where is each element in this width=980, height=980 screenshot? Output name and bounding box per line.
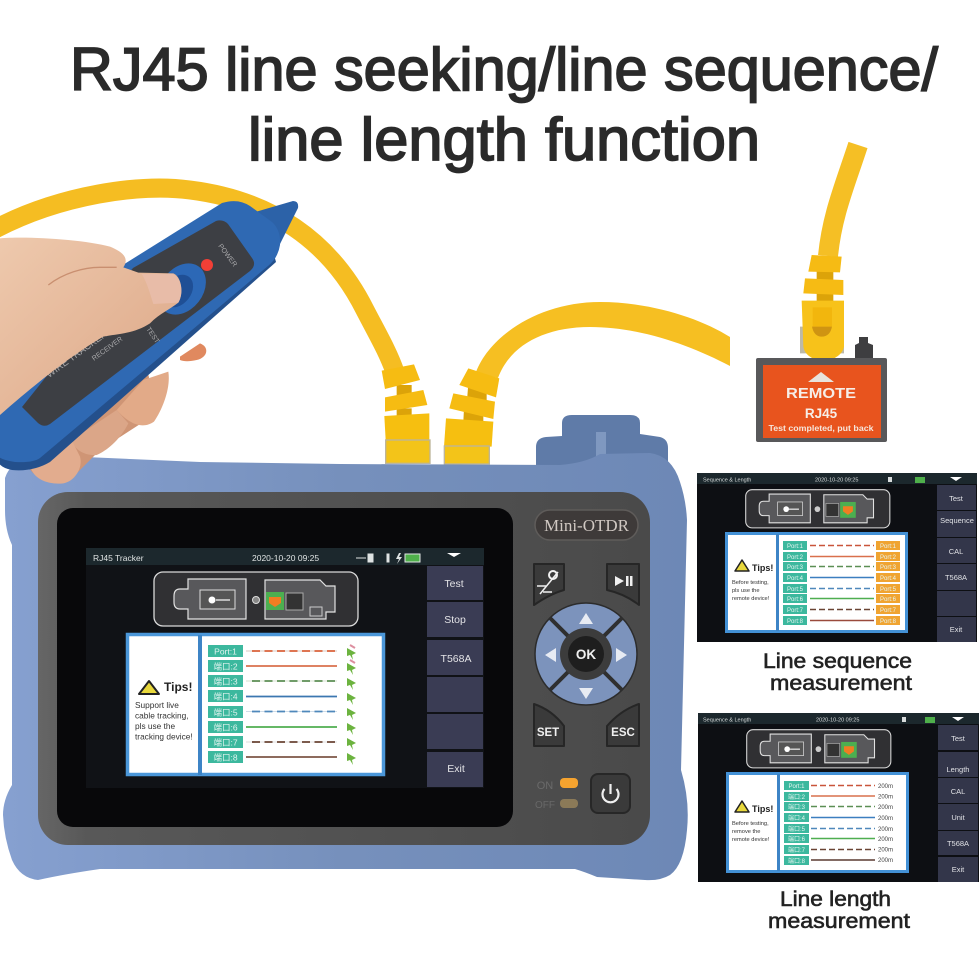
side buttons: Test (444, 578, 464, 590)
tracer labels: TEST (144, 326, 161, 346)
tips panel: pls use the (732, 588, 760, 594)
side buttons: Test (949, 494, 964, 503)
product badge (535, 510, 638, 540)
side buttons: Test (951, 734, 966, 743)
tips text: cable tracking, (135, 710, 188, 720)
remote module (756, 337, 887, 442)
port rows: Port:6 (880, 597, 897, 603)
hand: palm and thumb (0, 238, 181, 415)
tracer casing shadow edge (0, 240, 276, 470)
tips text: tracking device! (135, 732, 193, 742)
status bar: 2020-10-20 09:25 (252, 553, 319, 563)
side buttons: Exit (952, 865, 965, 874)
status bar: Sequence & Length (703, 718, 751, 724)
key: power (591, 774, 630, 813)
caption: line sequence: measurement (770, 672, 912, 695)
side buttons: T568A (947, 839, 969, 848)
remote module: REMOTE (786, 386, 856, 402)
side buttons: Sequence (940, 516, 974, 525)
side buttons: T568A (441, 653, 471, 665)
port rows: 端口:4 (213, 692, 238, 702)
caption: line length: Line length (780, 888, 891, 911)
side buttons: Stop (444, 614, 466, 626)
d-pad (535, 603, 637, 705)
caption: line length: measurement (768, 910, 910, 933)
port rows: Port:8 (880, 619, 897, 625)
side buttons: Length (947, 765, 969, 774)
port rows: Port:2 (880, 555, 897, 561)
tracer labels: POWER (216, 243, 238, 268)
power LED (201, 259, 213, 271)
tracer button (148, 254, 216, 324)
tracer probe tip (252, 201, 298, 244)
length screenshot (698, 713, 979, 882)
remote RJ45 plug (800, 255, 844, 362)
port rows: Port:1 (880, 544, 897, 550)
tracking signal icons (347, 645, 356, 765)
tips panel: Tips! (752, 804, 773, 814)
tips text: pls use the (135, 721, 176, 731)
connector: right RJ45 plug (444, 368, 499, 464)
port rows: Port:3 (787, 565, 804, 571)
caption: line length (768, 888, 910, 933)
port rows: Port:7 (880, 608, 897, 614)
tips panel: remote device! (732, 837, 770, 843)
tips panel: Tips! (752, 563, 773, 573)
caption: line sequence (763, 650, 912, 695)
tips panel: remote device! (732, 596, 770, 602)
remote module: RJ45 (805, 406, 838, 421)
port rows: Port:6 (787, 597, 804, 603)
port rows: 端口:5 (788, 825, 806, 833)
side buttons: CAL (951, 787, 965, 796)
hand: lower fingers (0, 343, 206, 484)
port rows (783, 541, 900, 625)
module graphic (747, 730, 891, 768)
port rows: 200m (878, 837, 893, 843)
module graphic (746, 490, 890, 528)
sequence screenshot (697, 473, 977, 642)
port rows: 200m (878, 784, 893, 790)
port rows: Port:3 (880, 565, 897, 571)
port rows: 端口:5 (213, 708, 238, 718)
port rows: 200m (878, 848, 893, 854)
port rows: Port:5 (880, 587, 897, 593)
port rows: 端口:2 (788, 793, 806, 801)
tracer casing (0, 201, 280, 462)
cable: right cable (476, 302, 730, 378)
status bar: Sequence & Length (703, 478, 751, 484)
tips panel: Before testing, (732, 580, 769, 586)
port rows: Port:4 (880, 576, 897, 582)
port rows: Port:1 (787, 544, 804, 550)
port rows: 端口:6 (788, 835, 806, 843)
module graphic (154, 572, 358, 626)
wire tracer (0, 201, 298, 470)
port rows: 端口:6 (213, 722, 238, 732)
tips panel (128, 634, 384, 775)
indicator lights (535, 778, 578, 811)
tips panel (726, 534, 906, 632)
warning icon (139, 681, 159, 694)
side buttons (938, 725, 978, 882)
tips panel: Tips! (164, 680, 192, 694)
port rows: 200m (878, 794, 893, 800)
key: search (534, 564, 564, 605)
tracer labels (44, 243, 238, 380)
side buttons (427, 566, 483, 787)
port rows: 200m (878, 805, 893, 811)
key: ESC (607, 704, 639, 746)
key: SET (534, 704, 564, 746)
caption: line sequence: Line sequence (763, 650, 912, 673)
key: SET: SET (537, 727, 559, 739)
side buttons: Unit (951, 813, 966, 822)
key: play pause (607, 564, 639, 605)
port rows: Port:2 (787, 555, 804, 561)
port rows: 200m (878, 816, 893, 822)
port rows: 端口:8 (213, 752, 238, 762)
tracer labels: RECEIVER (91, 336, 124, 363)
status bar: RJ45 Tracker (93, 553, 144, 563)
port rows: Port:7 (787, 608, 804, 614)
port rows (208, 645, 356, 765)
remote cable (828, 145, 858, 256)
bezel (38, 492, 650, 845)
port rows: Port:1 (214, 646, 237, 656)
port rows: 端口:3 (213, 676, 238, 686)
side buttons: Exit (950, 625, 963, 634)
port rows: Port:4 (787, 576, 804, 582)
tracer face panel (22, 220, 254, 426)
side buttons (937, 485, 976, 642)
product badge: Mini-OTDR (544, 516, 630, 535)
main screen (86, 548, 484, 788)
status bar (93, 553, 461, 564)
port rows: 端口:8 (788, 857, 806, 865)
port rows: 200m (878, 858, 893, 864)
status bar: 2020-10-20 09:25 (815, 478, 858, 484)
status bar: 2020-10-20 09:25 (816, 718, 859, 724)
side buttons: Exit (447, 763, 465, 775)
port rows: 端口:7 (213, 738, 238, 748)
port rows: Port:5 (787, 587, 804, 593)
status bar (703, 717, 964, 724)
side buttons: T568A (945, 573, 967, 582)
indicator lights: OFF (535, 800, 555, 811)
tips panel: Before testing, (732, 821, 769, 827)
tips text: Support live (135, 700, 179, 710)
indicator lights: ON (537, 780, 553, 792)
device body (3, 453, 688, 880)
tips text (135, 700, 193, 742)
device knob (536, 415, 668, 470)
port rows (784, 781, 893, 865)
port rows: 端口:3 (788, 803, 806, 811)
title: RJ45 line seeking/line sequence/ (70, 36, 938, 103)
tips panel: remove the (732, 829, 760, 835)
status bar (703, 477, 962, 484)
title: line length function (248, 106, 760, 173)
tips panel (728, 774, 908, 872)
key: ESC: ESC (611, 727, 635, 739)
remote module: Test completed, put back (768, 423, 874, 433)
connector: left RJ45 plug (382, 364, 430, 463)
port rows: 端口:4 (788, 814, 806, 822)
port rows: 200m (878, 827, 893, 833)
tracer labels: WIRE TRACKER (44, 329, 110, 380)
port rows: 端口:7 (788, 846, 806, 854)
port rows: Port:8 (787, 619, 804, 625)
cable: tracked cable (0, 188, 395, 372)
port rows: 端口:2 (213, 662, 238, 672)
side buttons: CAL (949, 547, 963, 556)
d-pad: OK (576, 647, 596, 662)
black screen surround (57, 508, 513, 827)
port rows: Port:1 (788, 784, 805, 790)
title (70, 36, 938, 173)
